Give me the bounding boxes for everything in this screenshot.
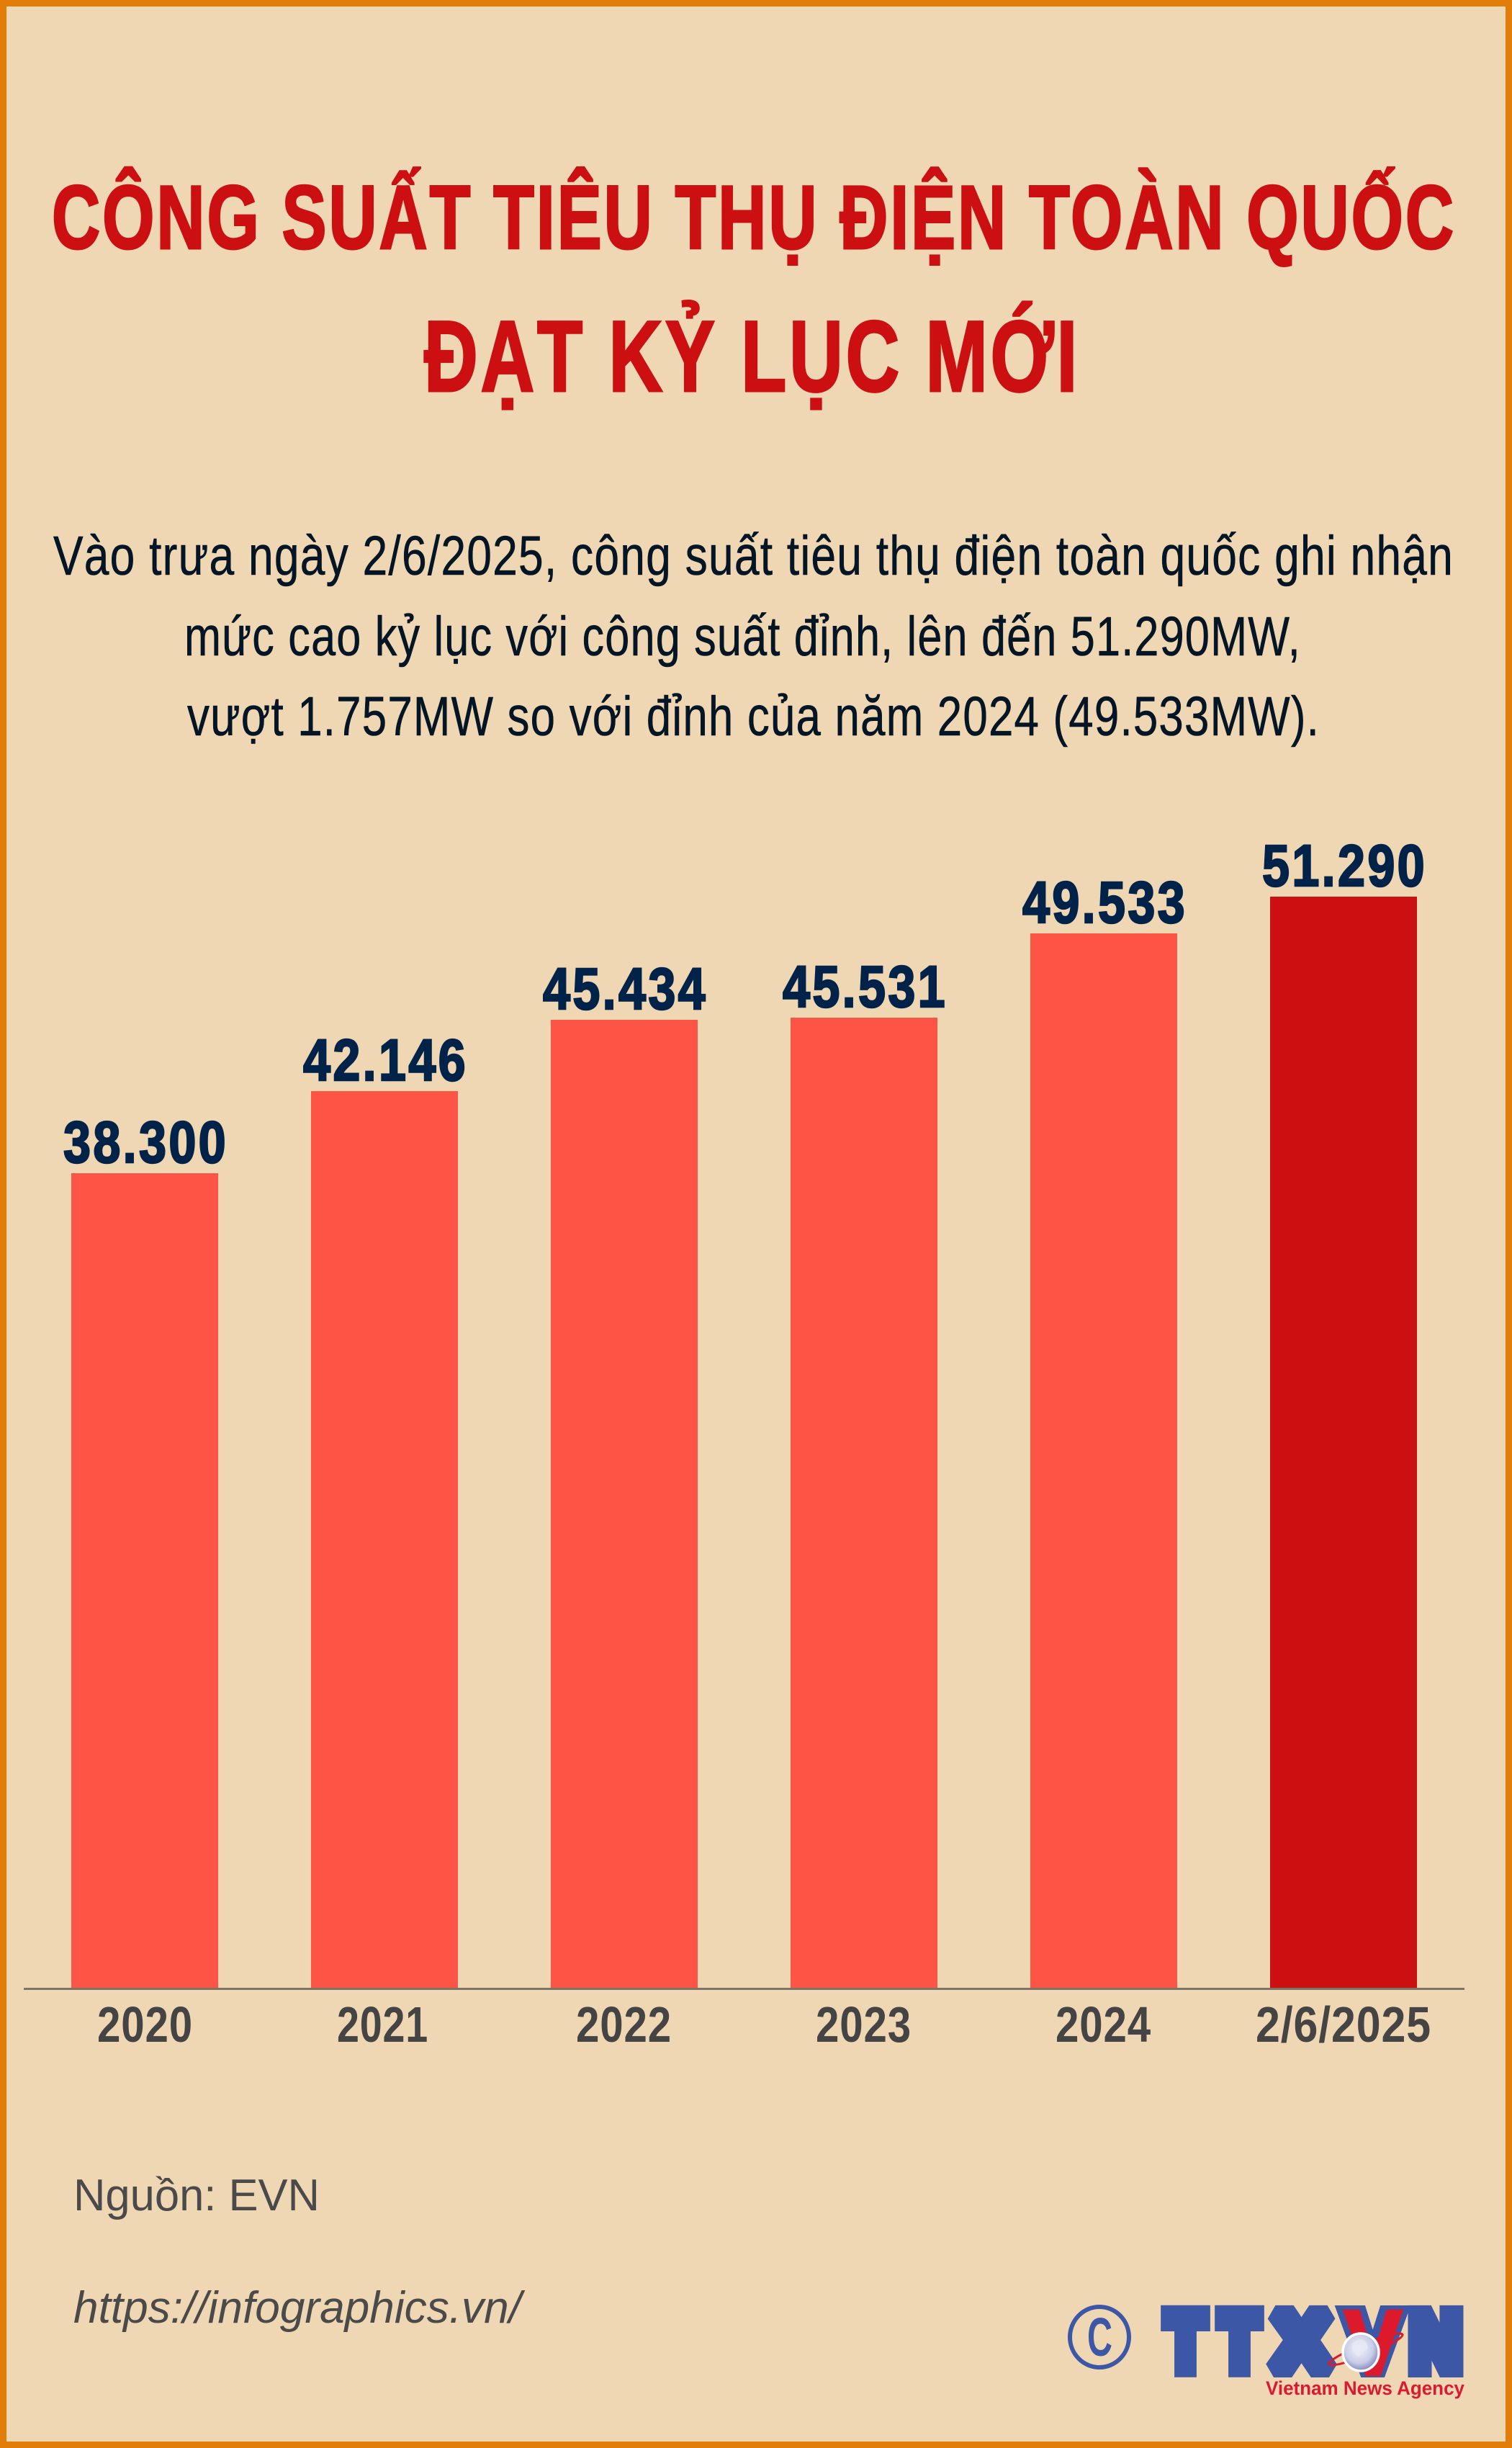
logo: TTXVN Vietnam News Agency: Vietnam News Agency: [1266, 2377, 1464, 2399]
logo: TTXVN Vietnam News Agency: [1166, 2293, 1464, 2399]
logo: TTXVN Vietnam News Agency: T: [1166, 2297, 1204, 2386]
title: [52, 168, 1456, 413]
value labels: 42.146: [303, 1028, 468, 1093]
logo: TTXVN Vietnam News Agency: X: [1273, 2297, 1330, 2386]
logo: TTXVN Vietnam News Agency: V: [1345, 2293, 1401, 2393]
value labels: 51.290: [1262, 833, 1427, 899]
value labels: 49.533: [1022, 870, 1187, 936]
value labels: 45.531: [783, 954, 948, 1020]
year labels: 2024: [1056, 1996, 1151, 2053]
year labels: 2020: [97, 1996, 193, 2053]
logo: TTXVN Vietnam News Agency: N: [1411, 2297, 1460, 2386]
icon: copyright: [1070, 2307, 1129, 2367]
logo: TTXVN Vietnam News Agency: V: [1346, 2297, 1399, 2386]
intro paragraph: [53, 525, 1454, 748]
icon: copyright: C: [1087, 2307, 1112, 2367]
year labels: 2022: [576, 1996, 672, 2053]
value labels: [63, 833, 1427, 1175]
value labels: 45.434: [543, 956, 708, 1022]
globe with orbit: [1327, 2329, 1405, 2371]
year labels: 2021: [337, 1996, 428, 2053]
axis line: [24, 1988, 1464, 1990]
logo: TTXVN Vietnam News Agency: T: [1221, 2297, 1259, 2386]
bars: [71, 897, 1417, 1988]
bar chart: [24, 833, 1464, 2053]
website url: https://infographics.vn/: [73, 2283, 526, 2333]
year labels: 2/6/2025: [1256, 1996, 1431, 2053]
source: Nguồn: EVN: [73, 2171, 320, 2220]
year labels: [97, 1996, 1431, 2053]
year labels: 2023: [816, 1996, 912, 2053]
value labels: 38.300: [63, 1110, 228, 1175]
title: ĐẠT KỶ LỤC MỚI: [424, 300, 1080, 413]
